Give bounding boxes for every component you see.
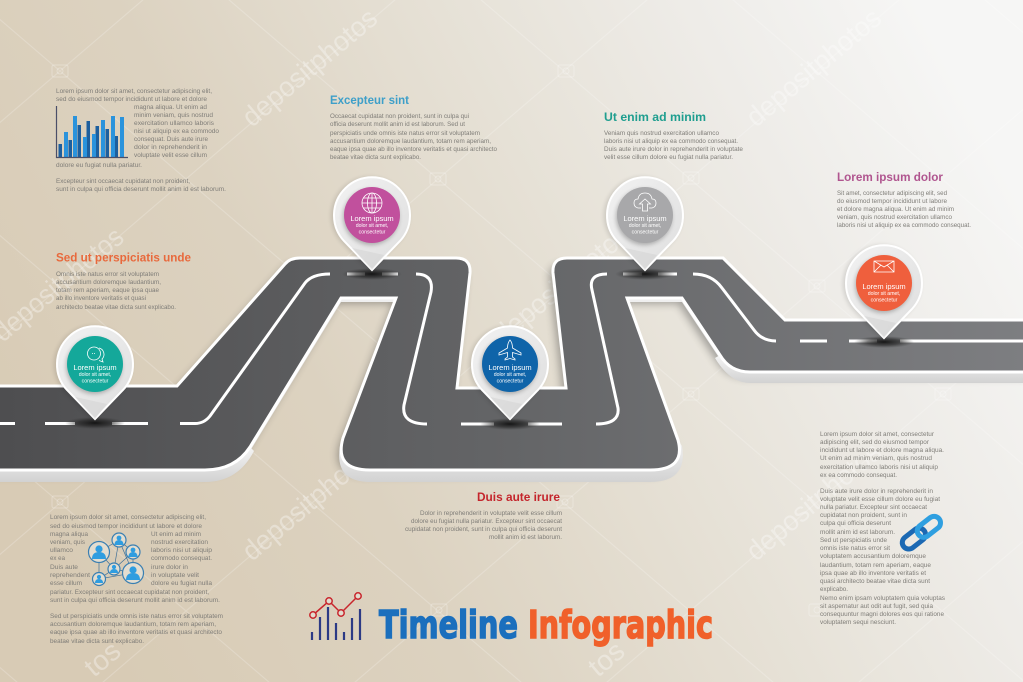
step text: Lorem ipsum dolor: Sit amet, consectetur adipiscing elit, sed xyxy=(837,190,947,197)
text block: bottom left with network: reprehendent xyxy=(50,572,90,579)
step text: Lorem ipsum dolor: do eiusmod tempor incididunt ut labore xyxy=(837,198,947,205)
text block: top left with bar chart: exercitation ullamco laboris xyxy=(134,120,214,127)
step text: Lorem ipsum dolor: laboris nisi ut aliquip ex ea commodo consequat. xyxy=(837,222,971,229)
pin 1: teal xyxy=(54,326,133,429)
text block: bottom left with network: magna aliqua xyxy=(50,531,88,538)
step heading: Sed ut perspiciatis unde: Sed ut perspiciatis unde xyxy=(56,250,191,264)
step text: Duis aute irure: Dolor in reprehenderit in voluptate velit esse cillum xyxy=(420,510,562,517)
text block: bottom right with link: cupidatat non proident, sunt in xyxy=(820,512,908,519)
text block: bottom right with link: adipiscing elit, sed do eiusmod tempor xyxy=(820,439,929,446)
pin 3: blue: Lorem ipsum xyxy=(488,363,532,372)
title xyxy=(379,603,713,647)
step heading: Duis aute irure: Duis aute irure xyxy=(477,490,560,504)
text block: bottom left with network: ex ea xyxy=(50,555,65,562)
text block: bottom right with link: Ut enim ad minim veniam, quis nostrud xyxy=(820,455,933,462)
step text: Duis aute irure: cupidatat non proident, sunt in culpa qui officia deserunt xyxy=(405,526,562,533)
icon: cloud upload xyxy=(634,193,656,211)
pin 3: blue xyxy=(469,326,548,430)
watermarks: depositphotos xyxy=(740,2,887,133)
text block: top left with bar chart: nisi ut aliquip ex ea commodo xyxy=(134,128,219,135)
text block: bottom left with network: commodo consequat. xyxy=(151,555,212,562)
icon: globe xyxy=(362,193,382,213)
step text: Sed ut perspiciatis unde xyxy=(56,271,176,311)
step text: Excepteur sint xyxy=(330,113,497,161)
text block: bottom left with network: Lorem ipsum dolor sit amet, consectetur adipiscing elit, xyxy=(50,514,206,521)
icon: people network xyxy=(88,533,144,586)
step text: Excepteur sint: officia deserunt mollit anim id est laborum. Sed ut xyxy=(330,121,465,128)
pin 4: grey xyxy=(604,177,683,280)
text block: bottom left with network xyxy=(50,514,223,645)
text block: top left with bar chart: sunt in culpa qui officia deserunt mollit anim id est laborum. xyxy=(56,186,226,193)
step text: Lorem ipsum dolor: et dolore magna aliqua. Ut enim ad minim xyxy=(837,206,954,213)
step text: Excepteur sint: beatae vitae dicta sunt explicabo. xyxy=(330,154,421,161)
step text: Sed ut perspiciatis unde: ab illo inventore veritatis et quasi xyxy=(56,295,146,302)
pin 3: blue: consectetur xyxy=(497,378,524,384)
text block: bottom left with network: sunt in culpa qui officia deserunt mollit anim id est laborum. xyxy=(50,597,220,604)
icon: airplane xyxy=(499,340,521,360)
step text: Ut enim ad minim: velit esse cillum dolore eu fugiat nulla pariatur. xyxy=(604,154,733,161)
title: Timeline xyxy=(379,603,518,647)
text block: bottom left with network: sed do eiusmod tempor incididunt ut labore et dolore xyxy=(50,523,203,530)
text block: top left with bar chart: sed do eiusmod tempor incididunt ut labore et dolore xyxy=(56,96,208,103)
text block: bottom right with link: voluptatem accusantium doloremque xyxy=(820,553,927,560)
text block: bottom right with link: nulla pariatur. Excepteur sint occaecat xyxy=(820,504,927,511)
text block: bottom left with network: dolore eu fugiat nulla xyxy=(151,580,213,587)
icon: chain link xyxy=(900,514,943,552)
pin 4: grey: consectetur xyxy=(632,230,659,236)
watermarks: depositphotos xyxy=(236,436,383,567)
watermarks: depositphotos xyxy=(740,436,887,567)
road side: extruded edges xyxy=(0,355,1023,482)
step heading: Excepteur sint: Excepteur sint xyxy=(330,93,409,107)
text block: bottom right with link: culpa qui officia deserunt xyxy=(820,520,891,527)
text block: top left with bar chart: voluptate velit esse cillum xyxy=(134,152,207,159)
watermarks: depositphotos xyxy=(488,219,635,350)
step text: Duis aute irure: mollit anim id est laborum. xyxy=(489,534,562,541)
road xyxy=(0,258,1023,482)
step text: Sed ut perspiciatis unde: accusantium doloremque laudantium, xyxy=(56,279,161,286)
step text: Lorem ipsum dolor xyxy=(837,190,971,229)
title: Infographic xyxy=(528,603,713,647)
text block: bottom left with network: nostrud exercitation xyxy=(151,539,209,546)
text block: bottom right with link: Sed ut perspiciatis unde xyxy=(820,537,887,544)
step text: Ut enim ad minim: Veniam quis nostrud exercitation ullamco xyxy=(604,130,719,137)
pin 2: magenta: dolor sit amet, xyxy=(356,223,388,229)
text block: bottom right with link: ipsa quae ab illo inventore veritatis et xyxy=(820,570,926,577)
text block: top left with bar chart: dolore eu fugiat nulla pariatur. xyxy=(56,162,142,169)
pin 1: teal: dolor sit amet, xyxy=(79,372,111,378)
text block: bottom right with link: omnis iste natus error sit xyxy=(820,545,890,552)
text block: bottom left with network: eaque ipsa quae ab illo inventore veritatis et quasi architecto xyxy=(50,629,222,636)
text block: bottom left with network: beatae vitae dicta sunt explicabo. xyxy=(50,638,144,645)
text block: bottom left with network: ullamco xyxy=(50,547,74,554)
text block: bottom left with network: Ut enim ad minim xyxy=(151,531,201,538)
pin 2: magenta: consectetur xyxy=(359,230,386,236)
icon: title chart xyxy=(310,593,361,640)
text block: bottom right with link: voluptatem sequi nesciunt. xyxy=(820,619,896,626)
text block: bottom left with network: esse cillum xyxy=(50,580,82,587)
text block: bottom left with network: Duis aute xyxy=(50,564,79,571)
text block: bottom right with link: exercitation ullamco laboris nisi ut aliquip xyxy=(820,464,939,471)
step text: Excepteur sint: eaque ipsa quae ab illo inventore veritatis et quasi architecto xyxy=(330,146,497,153)
text block: bottom left with network: veniam, quis xyxy=(50,539,85,546)
step text: Sed ut perspiciatis unde: totam rem aperiam, eaque ipsa quae xyxy=(56,287,159,294)
text block: bottom right with link: sit aspernatur aut odit aut fugit, sed quia xyxy=(820,603,933,610)
watermarks: tos xyxy=(582,635,630,682)
pin 5: orange: dolor sit amet, xyxy=(868,291,900,297)
step text: Ut enim ad minim: laboris nisi ut aliquip ex ea commodo consequat. xyxy=(604,138,738,145)
road lane markings xyxy=(0,274,1023,424)
step text: Ut enim ad minim xyxy=(604,130,744,161)
text block: top left with bar chart: minim veniam, quis nostrud xyxy=(134,112,213,119)
text block: bottom right with link: mollit anim id est laborum. xyxy=(820,529,895,536)
text block: top left with bar chart: Excepteur sint occaecat cupidatat non proident, xyxy=(56,178,190,185)
text block: top left with bar chart: magna aliqua. Ut enim ad xyxy=(134,104,207,111)
text block: bottom right with link: explicabo. xyxy=(820,586,848,593)
text block: bottom right with link: ex ea commodo consequat. xyxy=(820,472,897,479)
text block: bottom left with network: laboris nisi ut aliquip xyxy=(151,547,213,554)
pin 3: blue: dolor sit amet, xyxy=(494,372,526,378)
text block: bottom left with network: accusantium doloremque laudantium, totam rem aperiam, xyxy=(50,621,216,628)
icon: chat bubbles xyxy=(88,347,104,362)
pin 2: magenta xyxy=(331,177,410,280)
step text: Excepteur sint: perspiciatis unde omnis iste natus error sit voluptatem xyxy=(330,130,480,137)
text block: top left with bar chart: dolor in reprehenderit in xyxy=(134,144,208,151)
text block: bottom right with link: quasi architecto beatae vitae dicta sunt xyxy=(820,578,930,585)
text block: bottom right with link: Duis aute irure dolor in reprehenderit in xyxy=(820,488,934,495)
text block: bottom left with network: pariatur. Excepteur sint occaecat cupidatat non proident, xyxy=(50,589,209,596)
pin 2: magenta: Lorem ipsum xyxy=(350,214,394,223)
text block: top left with bar chart xyxy=(56,88,226,193)
text block: bottom right with link xyxy=(820,431,945,626)
step text: Ut enim ad minim: Duis aute irure dolor in reprehenderit in voluptate xyxy=(604,146,744,153)
step text: Sed ut perspiciatis unde: Omnis iste natus error sit voluptatem xyxy=(56,271,159,278)
step text: Duis aute irure: dolore eu fugiat nulla pariatur. Excepteur sint occaecat xyxy=(411,518,562,525)
text block: bottom right with link: Lorem ipsum dolor sit amet, consectetur xyxy=(820,431,934,438)
icon: envelope xyxy=(874,261,894,272)
step text: Sed ut perspiciatis unde: architecto beatae vitae dicta sunt explicabo. xyxy=(56,304,176,311)
pin 5: orange: Lorem ipsum xyxy=(862,282,906,291)
text block: bottom left with network: Sed ut perspiciatis unde omnis iste natus error sit voluptatem xyxy=(50,613,223,620)
watermarks: depositphotos xyxy=(236,2,383,133)
step heading: Ut enim ad minim: Ut enim ad minim xyxy=(604,110,706,124)
watermark camera icons xyxy=(52,65,951,616)
pin 4: grey: Lorem ipsum xyxy=(623,214,667,223)
step text: Excepteur sint: accusantium doloremque laudantium, totam rem aperiam, xyxy=(330,138,491,145)
text block: bottom right with link: Nemo enim ipsam voluptatem quia voluptas xyxy=(820,595,945,602)
text block: bottom right with link: laudantium, totam rem aperiam, eaque xyxy=(820,562,932,569)
pin 4: grey: dolor sit amet, xyxy=(629,223,661,229)
pin 5: orange xyxy=(843,245,922,348)
text block: bottom right with link: consequuntur magni dolores eos qui ratione xyxy=(820,611,944,618)
watermarks: tos xyxy=(78,635,126,682)
text block: top left with bar chart: consequat. Duis aute irure xyxy=(134,136,208,143)
text block: top left with bar chart: Lorem ipsum dolor sit amet, consectetur adipiscing elit, xyxy=(56,88,212,95)
pin 1: teal: consectetur xyxy=(82,378,109,384)
pin 1: teal: Lorem ipsum xyxy=(73,363,117,372)
step heading: Lorem ipsum dolor: Lorem ipsum dolor xyxy=(837,170,943,184)
step text: Duis aute irure xyxy=(405,510,562,541)
step text: Lorem ipsum dolor: veniam, quis nostrud exercitation ullamco xyxy=(837,214,952,221)
text block: bottom left with network: in voluptate velit xyxy=(151,572,199,579)
text block: bottom left with network: irure dolor in xyxy=(151,564,189,571)
icon: bar chart xyxy=(56,106,128,158)
pin 5: orange: consectetur xyxy=(871,298,898,304)
step text: Excepteur sint: Occaecat cupidatat non proident, sunt in culpa qui xyxy=(330,113,469,120)
text block: bottom right with link: incididunt ut labore et dolore magna aliqua. xyxy=(820,447,944,454)
text block: bottom right with link: voluptate velit esse cillum dolore eu fugiat xyxy=(820,496,940,503)
